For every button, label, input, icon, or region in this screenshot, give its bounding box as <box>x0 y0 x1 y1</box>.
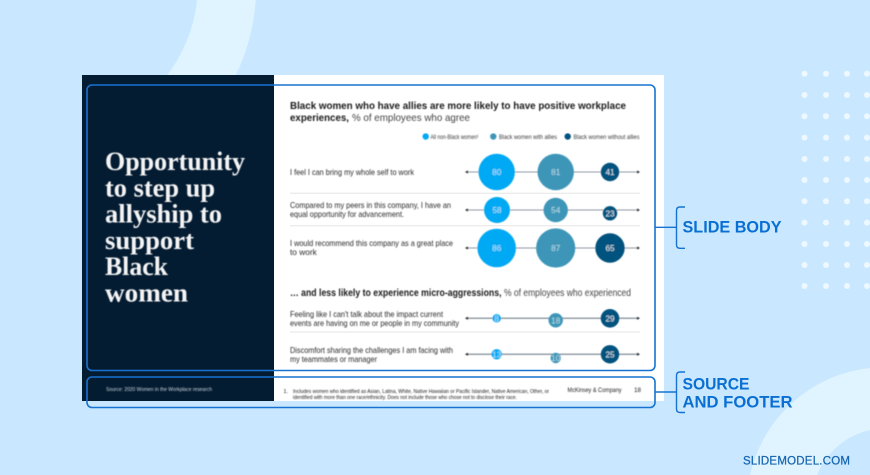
callout: source and footer bracket <box>655 372 685 412</box>
legend: Black women with allies <box>499 134 557 141</box>
row: recommend company <box>290 228 640 268</box>
row: can't talk about current events: 29 <box>605 314 615 323</box>
row separators <box>290 193 640 332</box>
row: discomfort sharing challenges: 10 <box>551 354 561 363</box>
title: slide title: to step up <box>105 174 215 203</box>
title: slide title: Opportunity <box>105 147 245 176</box>
heading: first chart heading: experiences, <box>290 113 349 124</box>
heading: first chart heading <box>290 101 626 124</box>
row: can't talk about current events: 8 <box>494 314 499 323</box>
row: recommend company: 86 <box>492 244 502 253</box>
footnote: identified with more than one race/ethnicity. Does not include those who chose not to disclose their race. <box>293 395 517 401</box>
row: can't talk about current events: Feeling like I can't talk about the impact current <box>290 309 444 319</box>
panel: slide screenshot <box>82 75 664 401</box>
heading: first chart heading: Black women who have allies are more likely to have positive workplace <box>290 101 626 112</box>
callout: slide body bracket <box>655 207 685 248</box>
row: bring whole self to work <box>290 154 640 190</box>
footnote: 1. <box>284 389 288 395</box>
row: discomfort sharing challenges: Discomfort sharing the challenges I am facing with <box>290 345 453 355</box>
row: discomfort sharing challenges: 13 <box>492 350 502 359</box>
callout: slide body label: SLIDE BODY <box>682 218 782 237</box>
row: equal opportunity <box>290 197 640 223</box>
callout: source and footer label <box>682 374 792 411</box>
company name and page number: McKinsey & Company <box>568 387 622 394</box>
callout: source and footer label: SOURCE <box>682 374 750 393</box>
legend: All non-Black women¹ <box>430 134 478 141</box>
callout: source and footer label: AND FOOTER <box>682 392 792 411</box>
title: slide title <box>105 147 245 308</box>
row: bring whole self to work: 41 <box>605 168 615 177</box>
title: slide title: women <box>105 279 189 308</box>
company name and page number: 18 <box>634 387 642 394</box>
heading: second chart heading: % of employees who experienced <box>504 288 631 299</box>
row: can't talk about current events <box>290 309 640 328</box>
row: bring whole self to work: I feel I can bring my whole self to work <box>290 167 415 177</box>
row: equal opportunity: 54 <box>551 206 561 215</box>
title: slide title: support <box>105 226 194 255</box>
row: recommend company: to work <box>290 247 318 257</box>
footnote <box>284 389 549 401</box>
row: discomfort sharing challenges: 25 <box>605 350 615 359</box>
title: slide title: allyship to <box>105 200 222 229</box>
row: can't talk about current events: 18 <box>551 316 561 325</box>
brand: website: SLIDEMODEL.COM <box>743 456 850 468</box>
heading: second chart heading: … and less likely to experience micro-aggressions, <box>290 288 502 299</box>
title: slide title: Black <box>105 252 169 281</box>
row: equal opportunity: 23 <box>605 209 615 218</box>
footnote: Includes women who identified as Asian, Latina, White, Native Hawaiian or Pacific Islander, Native American, Other, or <box>293 389 549 395</box>
source note: Source: 2020 Women in the Workplace research <box>106 387 212 393</box>
row: can't talk about current events: events are having on me or people in my community <box>290 318 460 328</box>
row: equal opportunity: equal opportunity for advancement. <box>290 209 404 219</box>
row: recommend company: 87 <box>551 244 561 253</box>
legend: Black women without allies <box>574 134 640 141</box>
frame: slide body outline <box>87 85 655 370</box>
row: recommend company: 65 <box>605 244 615 253</box>
row: equal opportunity: Compared to my peers in this company, I have an <box>290 200 451 210</box>
frame: source and footer outline <box>87 377 655 408</box>
row: bring whole self to work: 81 <box>551 168 561 177</box>
row: discomfort sharing challenges: my teammates or manager <box>290 354 377 364</box>
row: discomfort sharing challenges <box>290 345 640 364</box>
row: equal opportunity: 58 <box>492 206 502 215</box>
heading: first chart heading: % of employees who agree <box>352 113 470 124</box>
row: recommend company: I would recommend this company as a great place <box>290 238 453 248</box>
panel: dark title sidebar <box>82 75 274 401</box>
row: bring whole self to work: 80 <box>492 168 502 177</box>
legend <box>422 133 640 141</box>
